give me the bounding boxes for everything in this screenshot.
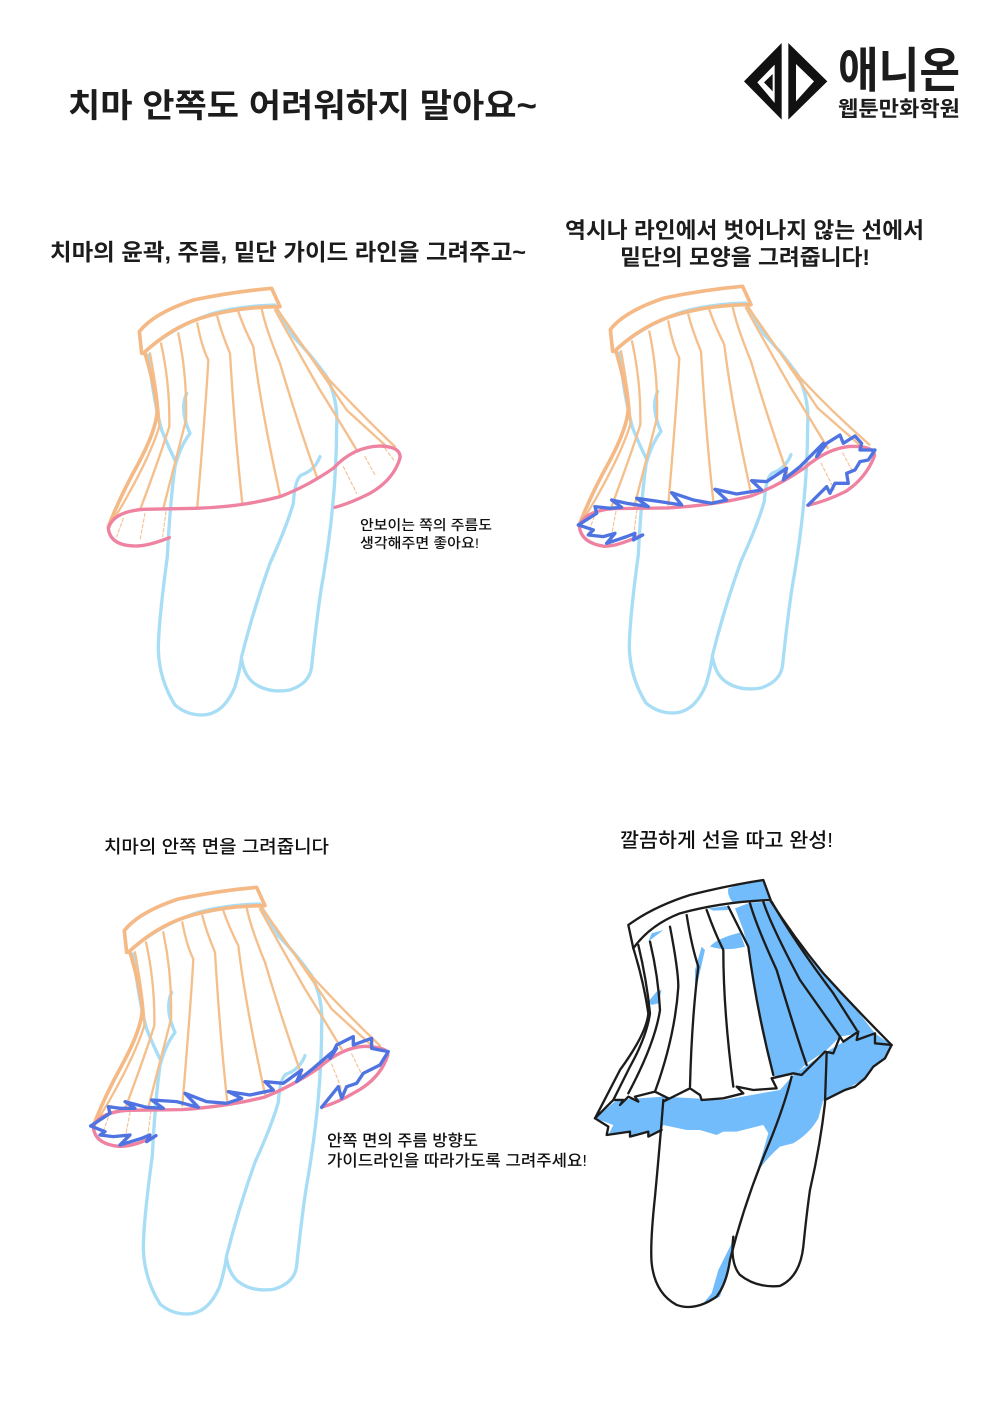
skirt outline guide <box>579 286 751 525</box>
logo name: 애니온 <box>838 45 960 98</box>
hidden pleats <box>117 448 395 540</box>
skirt outline guide <box>93 887 265 1126</box>
hem guide <box>579 446 874 546</box>
heading: step 3: 치마의 안쪽 면을 그려줍니다 <box>104 837 329 857</box>
legs guide <box>147 305 337 715</box>
title: 치마 안쪽도 어려워하지 말아요~ <box>68 87 537 124</box>
logo <box>744 43 960 121</box>
callout: inner pleat direction: 가이드라인을 따라가도록 그려주세요! <box>327 1152 587 1170</box>
heading: step 2 <box>565 218 924 270</box>
skirt pleats guide <box>584 306 869 518</box>
blue shadows <box>595 880 892 1303</box>
frill lines <box>578 435 875 543</box>
skirt pleats guide <box>98 907 380 1119</box>
hem guide <box>93 1046 388 1146</box>
legs guide <box>618 303 808 713</box>
callout: inner pleat direction: 안쪽 면의 주름 방향도 <box>327 1132 478 1150</box>
ink lines <box>595 880 892 1307</box>
skirt pleats guide <box>113 308 395 520</box>
heading: step 4: 깔끔하게 선을 따고 완성! <box>620 829 833 852</box>
skirt outline guide <box>108 288 280 527</box>
callout: hidden side pleats: 생각해주면 좋아요! <box>360 535 479 551</box>
legs guide <box>132 904 322 1314</box>
panel: hem shape sketch <box>578 286 875 713</box>
heading: step 2: 밑단의 모양을 그려줍니다! <box>620 245 870 270</box>
callout: hidden side pleats <box>360 517 492 551</box>
heading: step 2: 역시나 라인에서 벗어나지 않는 선에서 <box>565 218 924 243</box>
frill lines <box>91 1037 388 1145</box>
panel: guide lines sketch <box>108 288 400 715</box>
callout: hidden side pleats: 안보이는 쪽의 주름도 <box>360 517 492 533</box>
callout: inner pleat direction <box>327 1132 587 1170</box>
icon: diamond logo mark <box>744 43 827 120</box>
panel: inner face sketch <box>91 887 388 1314</box>
hem guide <box>108 446 400 546</box>
logo subtitle: 웹툰만화학원 <box>838 98 960 121</box>
heading: step 1: 치마의 윤곽, 주름, 밑단 가이드 라인을 그려주고~ <box>50 239 526 265</box>
hidden pleats <box>102 1054 362 1139</box>
panel: finished inked skirt <box>595 880 892 1307</box>
hidden pleats <box>588 453 853 538</box>
